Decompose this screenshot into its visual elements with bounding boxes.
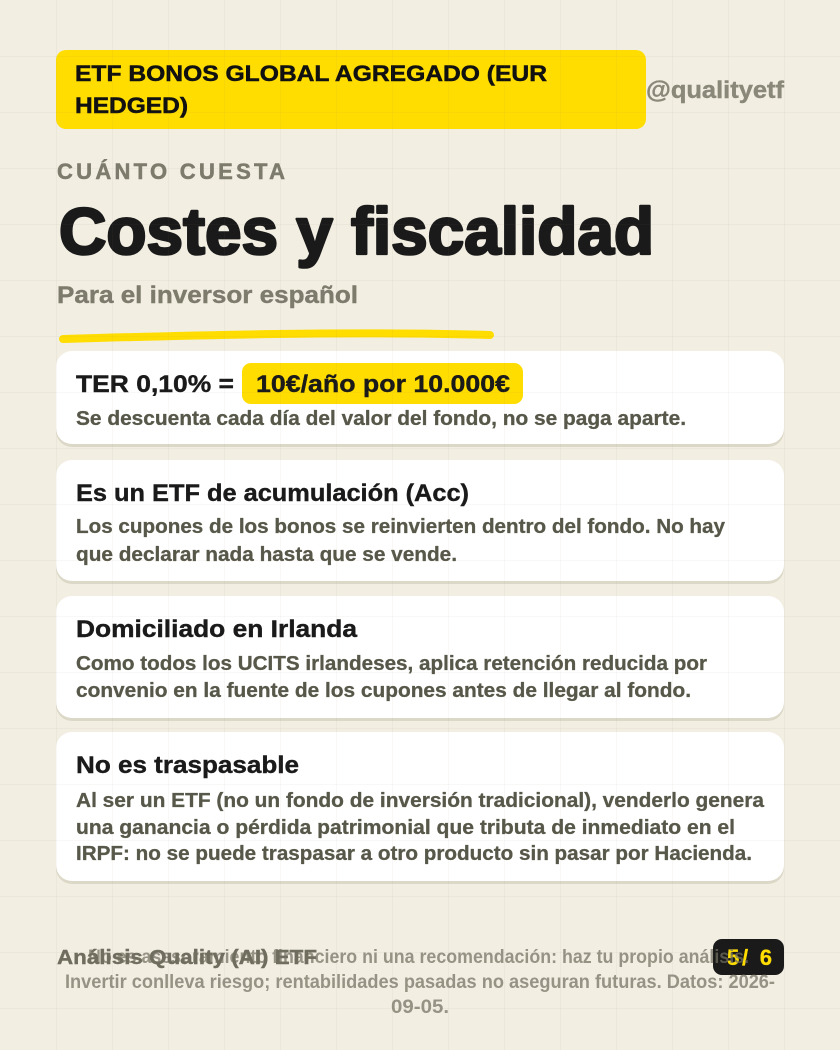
- panel: TER: TER 0,10% =: [76, 371, 234, 398]
- disclaimer: Invertir conlleva riesgo; rentabilidades pasadas no aseguran futuras. Datos: 2026-: [65, 972, 775, 993]
- panel: traspasable: IRPF: no se puede traspasar a otro producto sin pasar por Hacienda.: [76, 843, 752, 865]
- panel: Irlanda: Como todos los UCITS irlandeses, aplica retención reducida por: [76, 653, 707, 675]
- eyebrow: CUÁNTO CUESTA: [57, 159, 285, 184]
- highlight: cost: [242, 363, 523, 404]
- panel: acumulación: [56, 460, 784, 584]
- header tag: ETF BONOS GLOBAL AGREGADO (EUR: [75, 61, 547, 86]
- panel: Irlanda: Domiciliado en Irlanda: [76, 616, 357, 643]
- panel: traspasable: [56, 732, 784, 884]
- page badge: 5/ 6: [727, 945, 772, 970]
- panel: Irlanda: [56, 596, 784, 721]
- header tag: HEDGED): [75, 93, 188, 118]
- panel: traspasable: No es traspasable: [76, 752, 299, 779]
- handle: @qualityetf: [646, 77, 785, 104]
- subtitle: Para el inversor español: [57, 282, 358, 309]
- header tag: [56, 50, 646, 129]
- panel: acumulación: Los cupones de los bonos se reinvierten dentro del fondo. No hay: [76, 516, 726, 538]
- panel: TER: [56, 351, 784, 447]
- highlight: cost: 10€/año por 10.000€: [256, 371, 510, 398]
- panel: Irlanda: convenio en la fuente de los cupones antes de llegar al fondo.: [76, 680, 691, 702]
- title: Costes y fiscalidad: [59, 194, 654, 268]
- panel: acumulación: que declarar nada hasta que se vende.: [76, 544, 457, 566]
- disclaimer: [65, 947, 775, 1018]
- footer brand: Análisis Quality (AI) ETF: [57, 946, 317, 969]
- page badge: [713, 939, 784, 975]
- disclaimer: 09-05.: [391, 997, 449, 1018]
- panel: acumulación: Es un ETF de acumulación (Acc): [76, 480, 469, 507]
- panel: traspasable: una ganancia o pérdida patrimonial que tributa de inmediato en el: [76, 817, 735, 839]
- disclaimer: No es asesoramiento financiero ni una recomendación: haz tu propio análisis.: [88, 947, 749, 968]
- underline: [63, 333, 490, 339]
- panel: traspasable: Al ser un ETF (no un fondo de inversión tradicional), venderlo genera: [76, 790, 765, 812]
- panel: TER: Se descuenta cada día del valor del fondo, no se paga aparte.: [76, 408, 686, 430]
